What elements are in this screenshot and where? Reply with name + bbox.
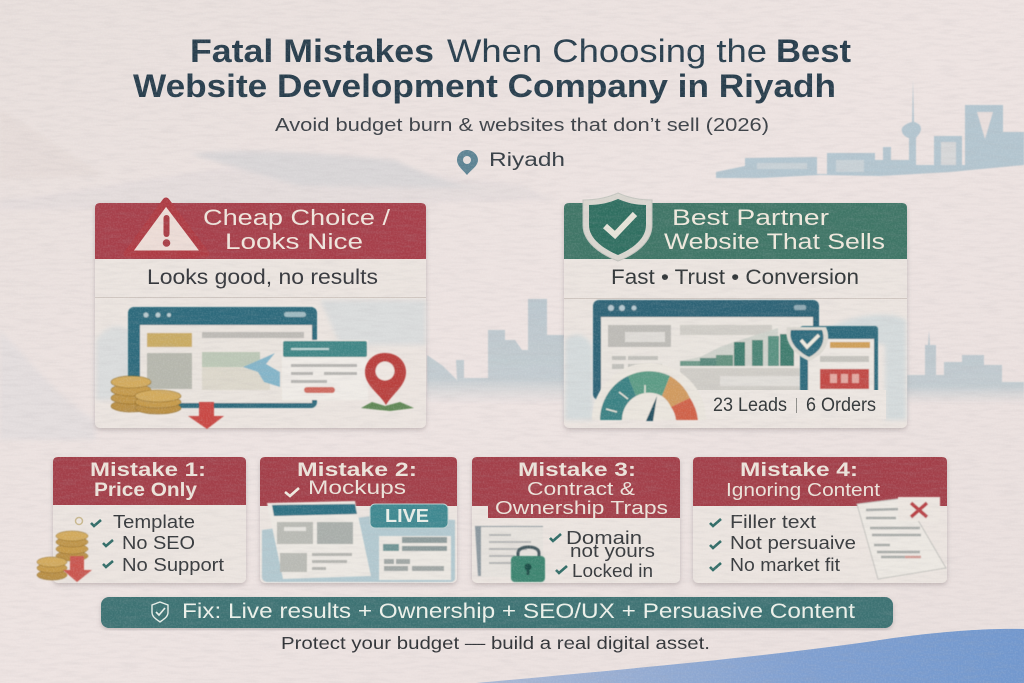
closing line: Protect your budget — build a real digital asset. [281, 633, 710, 653]
card header [472, 457, 680, 518]
heading [203, 205, 391, 254]
heading: Contract & [527, 478, 636, 499]
shaded backdrop [262, 515, 455, 582]
icon: coins [111, 376, 181, 414]
icon: small shield [786, 327, 828, 361]
heading [495, 459, 668, 518]
heading: Looks Nice [225, 229, 363, 254]
panel: cheap choice [95, 201, 426, 429]
icon: map pin [361, 353, 414, 411]
stats panel: 6 Orders [806, 395, 876, 416]
card header [260, 457, 457, 506]
heading: Mockups [308, 477, 406, 499]
arrow: down [188, 402, 224, 429]
title: Website Development Company in Riyadh [133, 68, 836, 104]
skyline: between the cards [427, 299, 564, 405]
heading: Mistake 2: [297, 459, 417, 481]
heading: Website That Sells [664, 229, 885, 254]
icon: padlock [511, 547, 545, 582]
skyline: top right [716, 80, 1024, 178]
panel: best partner [564, 193, 907, 428]
title: When Choosing the [447, 33, 767, 69]
card header [693, 457, 947, 506]
illustration: mockup sheet [267, 501, 371, 579]
icon: document with rejected mark [857, 497, 946, 579]
checklist: Filler text [730, 511, 816, 532]
checklist: Not persuaive [730, 532, 856, 553]
stats panel [690, 390, 886, 419]
icon: warning triangle [127, 201, 206, 254]
tagline: Fast • Trust • Conversion [611, 266, 859, 289]
checklist [710, 511, 856, 575]
illustration: website mockup [128, 307, 368, 408]
panel: mistake 1 [37, 457, 246, 583]
icon: check badge [152, 602, 168, 622]
checklist: No market fit [730, 554, 840, 575]
card body [260, 457, 457, 583]
fix banner: Fix: Live results + Ownership + SEO/UX + Persuasive Content [182, 600, 855, 623]
title [133, 33, 851, 104]
title: Fatal Mistakes [190, 33, 434, 69]
fix banner [101, 597, 893, 628]
card header [95, 203, 426, 259]
heading [285, 459, 417, 499]
checklist: Locked in [572, 560, 653, 581]
heading: Mistake 4: [740, 459, 858, 481]
checklist [76, 511, 224, 575]
card body [472, 457, 680, 583]
panel: mistake 2 [260, 457, 457, 583]
heading: Ignoring Content [726, 479, 880, 500]
card body [564, 203, 907, 428]
icon: shield [583, 193, 652, 261]
heading: Price Only [94, 480, 197, 501]
card header [53, 457, 246, 505]
heading: Best Partner [672, 205, 830, 230]
illustration: website dashboard [593, 300, 819, 400]
card header [564, 203, 907, 259]
gauge [592, 363, 706, 421]
checklist: No SEO [122, 532, 195, 553]
icon: location pin [457, 150, 478, 175]
checklist: Domain [566, 527, 642, 548]
icon: coins and arrow [37, 531, 92, 582]
blue wave [476, 629, 1024, 683]
subtitle: Avoid budget burn & websites that don’t sell (2026) [275, 114, 769, 135]
badge: live [370, 504, 448, 528]
shade behind laptop [96, 300, 426, 400]
heading [726, 459, 880, 500]
heading: Mistake 3: [518, 459, 636, 481]
illustration: mini page [800, 326, 878, 402]
badge: live: LIVE [385, 506, 429, 526]
location label [457, 150, 565, 175]
stats panel: 23 Leads [713, 395, 787, 416]
checklist: not yours [570, 540, 655, 561]
heading: Ownership Traps [495, 497, 668, 518]
heading: Cheap Choice / [203, 205, 391, 230]
panel: mistake 4 [693, 457, 947, 583]
checklist: No Support [122, 554, 224, 575]
title: Best [776, 33, 851, 69]
skyline: right of the cards [907, 330, 1024, 405]
illustration: live page [379, 536, 451, 580]
card body [693, 457, 947, 583]
card body [95, 203, 426, 428]
heading [90, 459, 206, 501]
tagline: Looks good, no results [147, 266, 378, 289]
checklist [550, 527, 655, 581]
heading [664, 205, 885, 254]
panel: mistake 3 [472, 457, 680, 583]
skyline: behind the subtitle [190, 151, 480, 188]
icon: contract document [475, 526, 543, 577]
heading: Mistake 1: [90, 459, 206, 481]
card body [53, 457, 246, 583]
shade behind browser [565, 315, 906, 420]
background hills [0, 110, 560, 440]
location label: Riyadh [489, 150, 565, 171]
checklist: Template [113, 511, 195, 532]
